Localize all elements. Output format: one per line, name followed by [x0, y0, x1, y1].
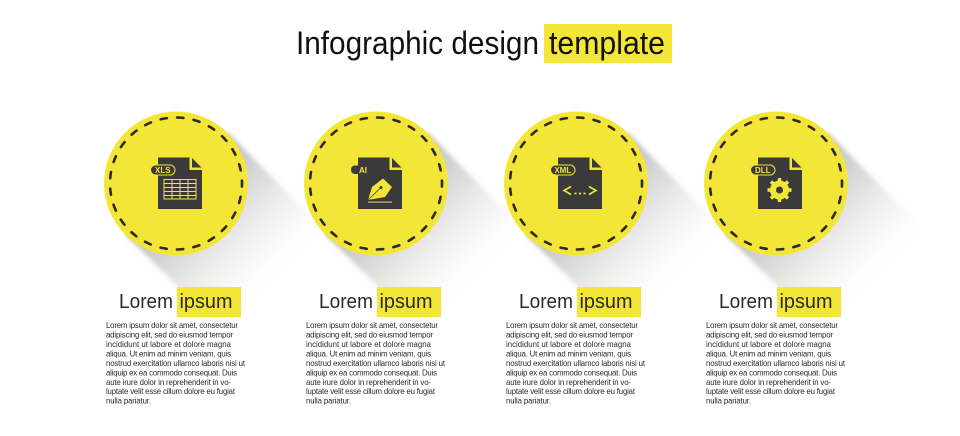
text block: aliqua. Ut enim ad minim veniam, quis	[506, 349, 631, 358]
text block: adipiscing elit, sed do eiusmod tempor	[706, 330, 833, 340]
text block: nulla pariatur.	[706, 397, 751, 406]
title	[296, 24, 672, 63]
text block: aliquip ex ea commodo consequat. Duis	[706, 368, 837, 377]
heading: Lorem	[519, 290, 573, 313]
text block	[706, 321, 846, 406]
text block: adipiscing elit, sed do eiusmod tempor	[106, 330, 233, 340]
text block: luptate velit esse cillum dolore eu fugiat	[706, 387, 836, 396]
heading	[719, 287, 841, 317]
text block: luptate velit esse cillum dolore eu fugiat	[306, 387, 436, 396]
heading: Lorem	[119, 290, 173, 313]
panel: XLS	[104, 112, 327, 406]
text block: nulla pariatur.	[106, 397, 151, 406]
title: Infographic design	[296, 25, 539, 61]
text block: incididunt ut labore et dolore magna	[306, 340, 432, 349]
text block: aute irure dolor in reprehenderit in vo-	[506, 378, 631, 387]
panel: AI	[304, 112, 527, 406]
text block: aliquip ex ea commodo consequat. Duis	[506, 368, 637, 377]
icon: XLS file: XLS	[155, 166, 171, 175]
text block: incididunt ut labore et dolore magna	[106, 340, 232, 349]
text block: aliquip ex ea commodo consequat. Duis	[306, 368, 437, 377]
text block	[506, 321, 646, 406]
text block: Lorem ipsum dolor sit amet, consectetur	[306, 321, 438, 330]
icon: DLL file with gear: DLL	[755, 166, 771, 175]
text block: aliquip ex ea commodo consequat. Duis	[106, 368, 237, 377]
heading: Lorem	[719, 290, 773, 313]
text block	[306, 321, 446, 406]
text block: adipiscing elit, sed do eiusmod tempor	[306, 330, 433, 340]
icon: AI file with pen nib: AI	[359, 166, 367, 175]
icon: XML file: XML	[554, 166, 571, 175]
text block	[106, 321, 246, 406]
text block: aliqua. Ut enim ad minim veniam, quis	[706, 349, 831, 358]
text block: aliqua. Ut enim ad minim veniam, quis	[306, 349, 431, 358]
text block: nostrud exercitation ullamco laboris nisi ut	[306, 359, 446, 368]
icon: XML file	[550, 158, 602, 209]
text block: luptate velit esse cillum dolore eu fugiat	[506, 387, 636, 396]
text block: luptate velit esse cillum dolore eu fugiat	[106, 387, 236, 396]
text block: Lorem ipsum dolor sit amet, consectetur	[106, 321, 238, 330]
text block: nostrud exercitation ullamco laboris nisi ut	[706, 359, 846, 368]
panel: XML	[504, 112, 727, 406]
text block: aute irure dolor in reprehenderit in vo-	[706, 378, 831, 387]
heading	[519, 287, 641, 317]
circle with long shadow	[504, 112, 727, 334]
text block: adipiscing elit, sed do eiusmod tempor	[506, 330, 633, 340]
text block: nulla pariatur.	[306, 397, 351, 406]
circle with long shadow	[704, 112, 927, 334]
heading: ipsum	[380, 290, 432, 313]
heading: Lorem	[319, 290, 373, 313]
icon: XLS file	[150, 158, 202, 209]
icon: DLL file with gear	[750, 158, 802, 209]
circle with long shadow	[104, 112, 327, 334]
text block: nulla pariatur.	[506, 397, 551, 406]
text block: nostrud exercitation ullamco laboris nisi ut	[506, 359, 646, 368]
heading	[119, 287, 241, 317]
text block: aute irure dolor in reprehenderit in vo-	[106, 378, 231, 387]
text block: incididunt ut labore et dolore magna	[506, 340, 632, 349]
title: template	[549, 25, 665, 61]
heading	[319, 287, 441, 317]
heading: ipsum	[180, 290, 232, 313]
circle with long shadow	[304, 112, 527, 334]
text block: incididunt ut labore et dolore magna	[706, 340, 832, 349]
text block: nostrud exercitation ullamco laboris nisi ut	[106, 359, 246, 368]
text block: aliqua. Ut enim ad minim veniam, quis	[106, 349, 231, 358]
text block: Lorem ipsum dolor sit amet, consectetur	[706, 321, 838, 330]
text block: aute irure dolor in reprehenderit in vo-	[306, 378, 431, 387]
icon: AI file with pen nib	[351, 158, 402, 209]
panel: DLL	[704, 112, 927, 406]
heading: ipsum	[580, 290, 632, 313]
text block: Lorem ipsum dolor sit amet, consectetur	[506, 321, 638, 330]
heading: ipsum	[780, 290, 832, 313]
